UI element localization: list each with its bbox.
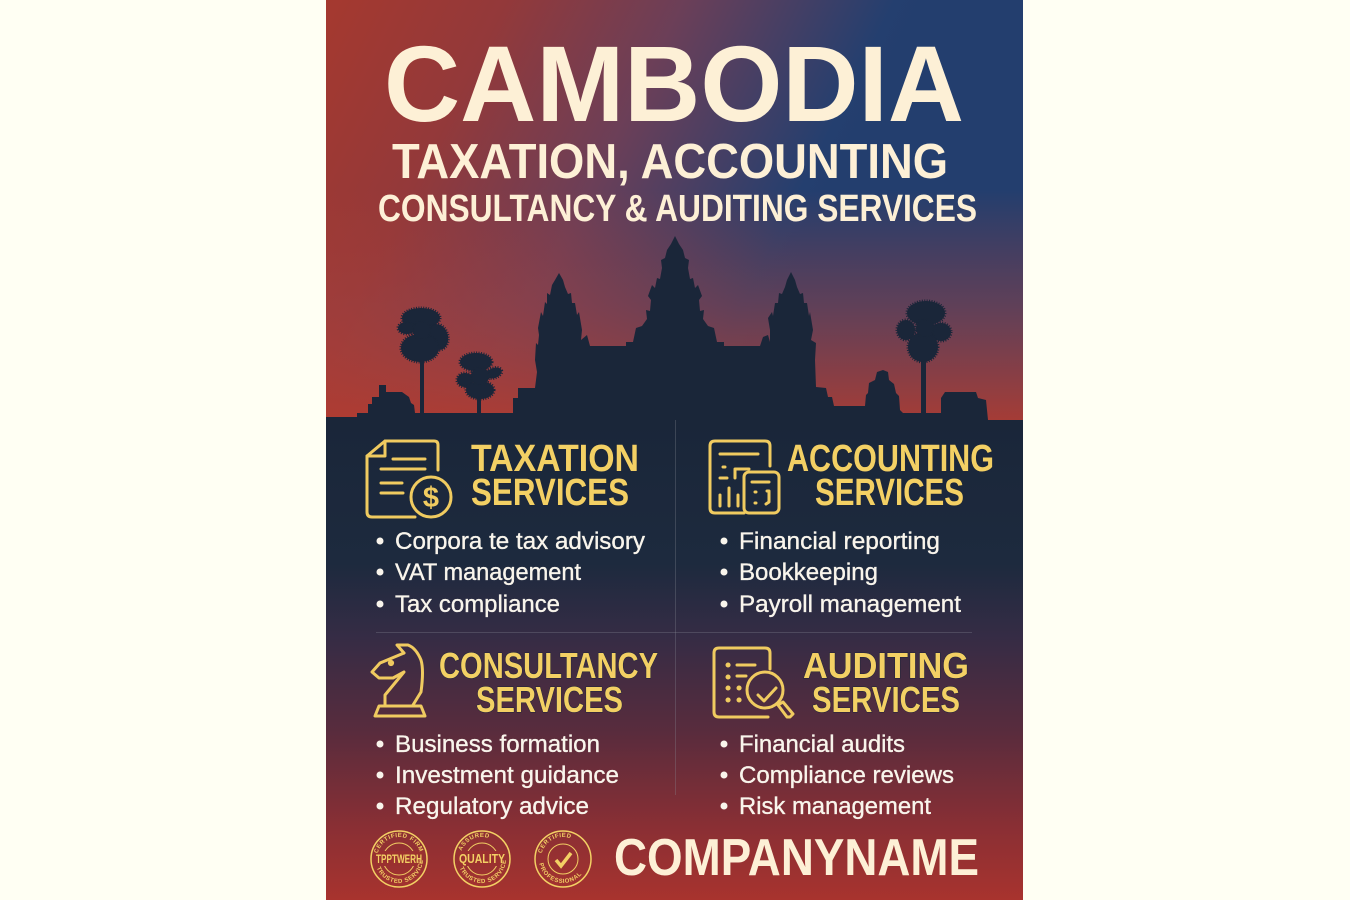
panel: auditing services — [714, 645, 969, 820]
heading: ACCOUNTING — [787, 438, 994, 480]
palm tree left — [398, 308, 451, 414]
heading: SERVICES — [815, 472, 964, 514]
badge: check seal: PROFESSIONAL — [539, 862, 582, 883]
badge: quality seal: QUALITY — [459, 851, 505, 866]
badge: seal one: TRUSTED SERVICE — [377, 860, 423, 884]
heading: SERVICES — [812, 679, 960, 720]
company name: COMPANYNAME — [614, 829, 979, 887]
heading: TAXATION — [471, 438, 639, 480]
bullet list: VAT management — [395, 559, 581, 586]
panel: lower services background — [326, 420, 1023, 900]
bullet list — [720, 731, 954, 820]
bullet list: Business formation — [395, 731, 600, 758]
badge: check seal — [534, 830, 592, 888]
subtitle line two: CONSULTANCY & AUDITING SERVICES — [378, 188, 977, 230]
panel: accounting services — [710, 438, 994, 618]
badge: quality seal: TRUSTED SERVICE — [460, 860, 506, 884]
heading: CONSULTANCY — [439, 645, 658, 686]
icon: chess knight — [372, 645, 425, 716]
badge: seal one: CERTIFIED FIRM — [374, 832, 424, 853]
horizontal divider — [376, 632, 972, 633]
title: CAMBODIA — [384, 23, 964, 144]
ground and temple — [326, 236, 1023, 430]
bullet list — [376, 528, 646, 618]
badge: seal one — [370, 830, 428, 888]
badge: quality seal: ASSURED — [458, 832, 489, 851]
heading: SERVICES — [471, 472, 629, 514]
bullet list: Corpora te tax advisory — [395, 528, 646, 555]
bullet list: Compliance reviews — [739, 762, 954, 789]
bullet list: Regulatory advice — [395, 793, 589, 820]
bullet list — [376, 731, 619, 820]
bullet list: Investment guidance — [395, 762, 619, 789]
bullet list: Payroll management — [739, 591, 961, 618]
icon: accounting report — [710, 441, 779, 513]
bullet list — [720, 528, 961, 618]
panel: taxation services — [367, 438, 646, 618]
icon: tax document with dollar coin: $ — [423, 482, 439, 514]
temple skyline silhouette — [326, 236, 1023, 430]
palm tree small — [457, 353, 503, 414]
heading: SERVICES — [476, 679, 623, 720]
icon: tax document with dollar coin — [367, 441, 451, 517]
subtitle line one: TAXATION, ACCOUNTING — [392, 135, 948, 189]
icon: audit checklist with magnifier — [714, 648, 793, 717]
bullet list: Financial audits — [739, 731, 905, 758]
bullet list: Bookkeeping — [739, 559, 878, 586]
badge: check seal: CERTIFIED — [538, 832, 571, 853]
bullet list: Tax compliance — [395, 591, 560, 618]
palm tree right — [897, 301, 951, 414]
bullet list: Financial reporting — [739, 528, 940, 555]
bullet list: Risk management — [739, 793, 931, 820]
vertical divider — [675, 420, 676, 795]
panel: sunset sky — [326, 0, 1023, 425]
panel: consultancy services — [372, 645, 658, 820]
badge: seal one: TPPTWERH — [376, 852, 422, 866]
heading: AUDITING — [803, 645, 969, 686]
badge: quality seal — [453, 830, 511, 888]
